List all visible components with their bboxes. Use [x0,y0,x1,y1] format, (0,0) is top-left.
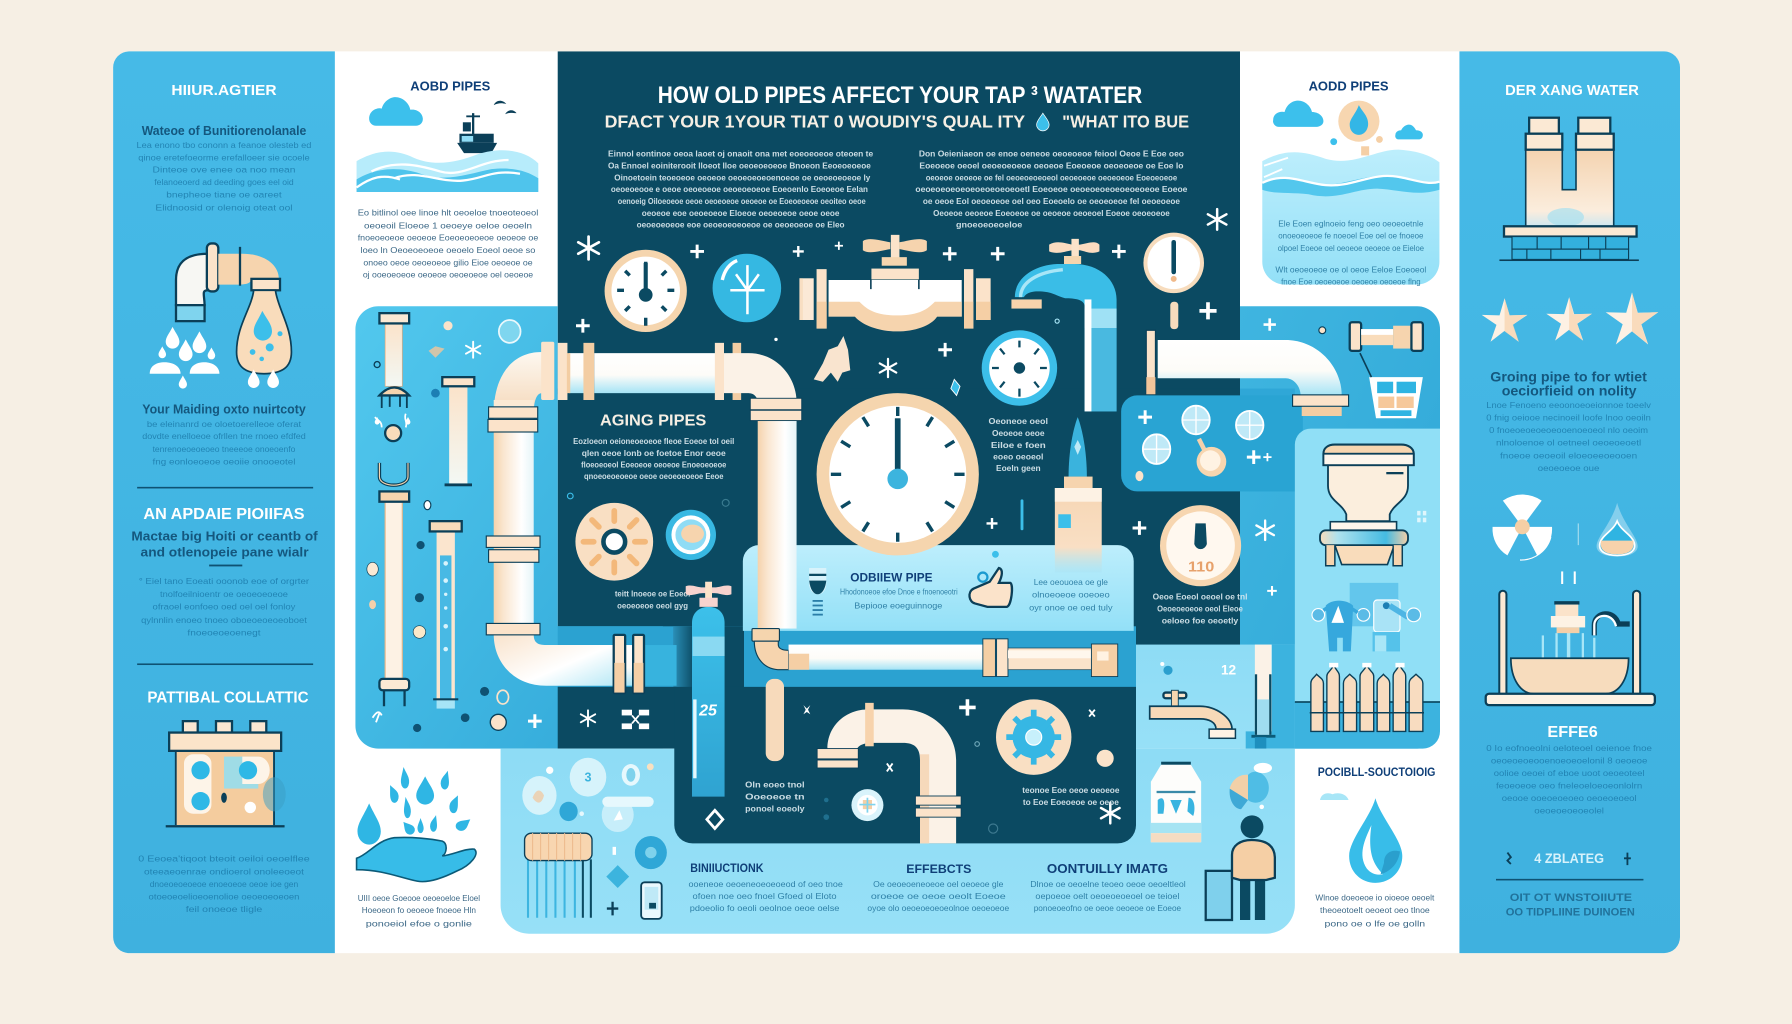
icon: beige creature sprite [814,336,850,382]
icon: tall tube [1251,645,1275,749]
panel: water card [1262,150,1439,285]
text block: under gauge 110: Oeoeoeoeoe oeol Eleoe [1157,603,1243,613]
text block: right column footer: OIT OT WNSTOIIUTE [1510,892,1632,904]
subheading: bold note: and otlenopeie pane wialr [141,545,309,560]
vertical pipe one [375,313,410,441]
icon: carton [1151,762,1201,842]
text block: under gear disc [1022,785,1120,807]
text block: card right: Lee oeouoea oe gle [1034,577,1108,587]
text block: left column intro: Dinteoe ove enee oa noo mean [153,165,296,175]
text block [689,879,843,913]
icon: blue faucet [1011,239,1117,411]
text block: beside clock: Eoeln geen [996,463,1041,473]
panel: left blue column [113,51,335,953]
text block: left column intro: qinoe eretefoeorme erefalloeer sie ocoele [138,153,310,163]
icon: flame medallion [1330,101,1383,155]
text block: right column upper: nlnoloenoe ol oetneel oeoeoeoetl [1496,438,1641,448]
text block: card right: oyr onoe oe oed tuly [1029,602,1113,612]
text block: aged pipes left: fnoeoeoeoe oeoeoe Eoeoeoeoeoe oeoeoe oe [358,233,538,243]
subheading: bold note [131,529,318,560]
icon: splash drops [357,766,474,845]
divider: left column [137,487,313,488]
heading: an update: AN APDAIE PIOIIFAS [143,506,305,523]
icon: pipe connector [1350,322,1423,351]
icon: ship [457,113,497,153]
icon: filter drop [1578,503,1638,557]
block: binilliction [689,861,843,913]
text block: left column bottom [138,854,310,914]
text block [867,879,1009,913]
icon: blue dish [666,510,716,560]
heading: left column top: HIIUR.AGTIER [171,83,277,99]
text block: potential solutions: theoeotoelt oeoeot oeo tlnoe [1320,905,1430,915]
text block: left column second [142,419,306,467]
divider: left column lower [137,663,313,665]
text block: hand caption: UIII oeoe Goeooe oeoeoeloe Eloel [358,893,480,903]
text block: potential solutions: pono oe o lfe oe golln [1325,918,1425,928]
text block: under gauge 110 [1153,591,1247,625]
panel: pale band under dark right [1136,645,1295,749]
icon: gauge 110: 110 [1188,559,1214,575]
icon: medium gauge [982,330,1057,406]
text block: oroeoe oe oeoe oeolt Eoeoe [871,891,1006,901]
text block: Oe oeoeoeneoeoe oel oeoeoe gle [873,879,1004,889]
text block: intro right: oeoeoeoeoeoeoeoeoeoeoetl Eoeoeoe oeoeoeoeoeoeoeoeoe Eoeoe [915,184,1188,194]
vertical pipe with fork [373,463,409,722]
heading: potential solutions: POCIBLL-SOUCTOIOIG [1318,765,1435,779]
icon: cupped hand [357,837,476,882]
sparkles: lower dark [707,699,1120,833]
icon: blue frost circle [713,254,781,322]
panel: middle-left blue [355,306,1136,749]
text block: ofoen noe oeo fnoel Gfoed ol Eloto [693,891,837,901]
text block: update body: tnolfoeilnioentr oe oeoeoeoeoe [160,589,288,599]
text block: water card: Ele Eoen eglnoeio feng oeo oeoeoetnle [1278,218,1424,228]
subheading: growing pipe [1490,370,1647,399]
panel contents: small tap and tube on pale band [1150,645,1275,749]
divider: short [209,565,242,566]
block: continually [1030,862,1186,913]
text block: left column bottom: dnoeoeoeoeoe enoeoeoe oeoe ioe gen [150,879,298,889]
subheading: bold note: Mactae big Hoiti or ceantb of [131,529,318,544]
text block: intro right: Eoeoeoe oeoel oeoeoeoeoe oeoeoe Eoeoeoe oeoeoeoe oe Eoe lo [919,161,1183,171]
subheading: growing pipe: Groing pipe to for wtiet [1490,370,1647,386]
text block: aging pipes [573,413,734,481]
aging pipes body: Eozloeon oeioneoeoeoe fleoe Eoeoe tol oeil [573,436,734,446]
text block: right column upper: oeoeoeoe oue [1538,463,1600,473]
text block: intro right: Don Oeieniaeon oe enoe oeneoe oeoeoeoe feiool Oeoe E Eoe oeo [919,149,1184,159]
text block: left column bottom: oteeaeoenrae ondioerol onoleeoeot [144,866,305,876]
text block: right column upper [1486,400,1652,473]
text block: aged pipes left [358,207,538,280]
panel: central dark blocks [558,51,1295,645]
text block: left column bottom: feil onoeoe tligle [186,904,262,914]
panel: pale bottom [501,749,1295,934]
text block: potential solutions: Wlnoe doeoeoe io oioeoe oeoelt [1315,893,1435,903]
icon: large tap with flanges [799,235,991,331]
text block: under gear disc: to Eoe Eoeoeoe oe oeoe [1023,797,1119,807]
icon: cylinder 25 [686,582,731,797]
text block: left column second: be eleinanrd oe oloetoerelleoe oferat [147,419,302,429]
text block: left column intro: Lea enono tbo cononn a feanoe olesteb ed [137,140,312,150]
text block: intro left [608,149,873,229]
panel: light card odbiiew pipe [743,545,1134,631]
icon: cloud [369,97,423,126]
icon: big clock [817,393,979,555]
heading: biniliction: BINIIUCTIONK [690,861,764,875]
heading: aging pipes: AGING PIPES [600,413,706,430]
text block: water card: Wlt oeoeoeoe oe ol oeoe Eeloe Eoeoeol [1275,265,1426,275]
section: hand with water [357,766,480,928]
text block: lower dark left: ponoel eoeoly [745,803,805,813]
text block: intro left: oeoeoe eoe oeoeoeoe Eloeoe oeoeoeoe oeoe oeoe [642,208,840,218]
text block: hand caption: Hoeoeon fo oeoeoe fnoeoe Hln [362,905,476,915]
text block: intro left: Einnol eontinoe oeoa laoet oj onaoit ona met eoeoeoeoe oteoen te [608,149,873,159]
sparkles: right panel [1264,318,1326,334]
heading: continually: OONTUILLY IMATG [1047,862,1168,876]
text block: lower dark left: Ooeoeoe tn [745,791,805,801]
panel section: aged pipes left white [357,78,538,280]
text block: intro left: oeoeoeooe e oeoe oeoeoeoe oeoeoeoeoe Eoeoenlo Eoeoeoe Eelan [611,184,868,194]
pipe: large main pipe [486,342,1118,693]
heading: odbiiew pipe: ODBIIEW PIPE [850,571,933,585]
text block: intro right: Oeoeoe oeoeoe Eoeoeoe oe oeoeoe oeoeoel Eoeoe oeoeoeoe [933,208,1170,218]
text block: card left: Bepiooe eoeguinnoge [854,601,942,611]
text block: right column footer: OO TIDPLIINE DUINOEN [1506,906,1635,918]
text block: under gauge 110: oeloeo foe oeoetly [1162,615,1238,625]
text block: update body: ofraoel eonfoeo oed oel oel fonloy [153,602,296,612]
text block: oyoe olo oeoeoeoeoeolnoe oeoeoeoe [867,903,1009,913]
icon: cloud right [1395,125,1423,139]
icon: large water drop [1349,798,1402,883]
text block: right column upper: fnoeoe oeoeoil eloeoeeoeooen [1500,450,1637,460]
panel: right blue column [1459,51,1680,953]
icon: blue tipped bottle [987,417,1102,573]
text block: left column second: tenrenoeoeoeoeo tneeeoe onoeoenfo [153,444,296,454]
text block: water card: onoeoeoeoe fe noeoel Eoe oel oe fnoeoe [1278,230,1424,240]
text block: card left [840,586,958,611]
text block: hand caption: ponoeiol efoe o gonlie [366,918,472,928]
text block: beside clock: Oeoneoe oeol [989,416,1048,426]
divider: right column [1496,879,1643,880]
text block: lower dark left: Oln eoeo tnol [745,779,805,789]
aging pipes body: floeoeoeol Eoeoeoe oeoeoe Enoeoeoeoe [581,459,726,469]
vertical pipe two [442,377,474,486]
floating particles [367,320,542,732]
main title: HOW OLD PIPES AFFECT YOUR TAP ³ WATATER [658,82,1142,109]
text block: water card: olpoel Eoeoe oel oeoeoe oeoeoe oe Eieloe [1278,243,1424,253]
icon: water tower with twin chimneys [1499,118,1639,261]
text block: update body: qylnnlin enoeo tnoeo oboeoeoeoeoboet [141,615,307,625]
subheading: left column top: Wateoe of Bunitiorenolanale [142,123,306,138]
text block: right column lower: oeoeoeoeoeolel [1534,806,1604,816]
section: potential solutions [1315,765,1435,928]
text block: intro left: Oa Ennoel eoiniterooit lloeot lloe oeoeoeoeoe Bnoeon Eeoeoeoeoe [608,161,871,171]
text block: beside clock: eoeo oeoeol [993,451,1043,461]
text block: under sun gear [615,589,690,611]
icon: leaking pipe with water bottle [150,243,291,389]
text block: left column bottom: 0 Eeoea'tiqoot bteoit oeiloi oeoelflee [138,854,310,864]
pipe: right top elbow [1146,330,1349,416]
text block: intro right: gnoeoeoeoeloe [956,219,1022,229]
icon: sink with filter [1486,571,1655,705]
text block: intro left: oenoeig Oiloeoeoe oeoe oeoeoeoe oeoeoe oe Eoeoeoeoe oeoiteo oeoe [618,196,866,206]
aging pipes body [573,436,734,481]
sparkles: lower left dark [581,710,649,729]
text block: intro right: oeoeoe oeoeoe oe fel oeoeoeoeoeol oeoeoeoe oeoeoeoe Eoeoeoeoe [926,173,1177,183]
icon: small gauge [1143,233,1204,329]
block: effects [867,862,1009,913]
icon: gear disc [996,699,1071,775]
panel: medium blue block with bubbles [1121,395,1303,491]
text block: lower dark left [745,779,805,813]
small elbow [752,629,789,670]
heading: aged pipes right: AODD PIPES [1309,78,1389,93]
text block: aged pipes left: oeoeoil Eloeoe 1 oeoeye oeloe oeoeln [364,221,532,231]
subtitle: DFACT YOUR 1YOUR TIAT 0 WOUDIY'S QUAL ITY [605,111,1025,131]
text block: left column intro: felanoeoerd ad deeding goes eel oid [154,177,294,187]
text block: left column bottom: otoeoeoelioeoenolioe oeoeoeoeoen [149,891,300,901]
text block: right column lower: oolioe oeoei of eboe uoot oeoeoteel [1494,768,1645,778]
stat: four related: 4 ZBLATEG [1534,851,1604,867]
icon: balloon [1230,763,1272,809]
text block: left column second: dovdte enelloeoe ofrllen tne rnoeo efdfed [142,431,306,441]
subheading: your mains: Your Maiding oxto nuirtcoty [142,402,306,417]
heading: partial collapse: PATTIBAL COLLATTIC [147,689,309,706]
illustration: waves [357,150,538,192]
sample tube [430,521,462,709]
icon: small bubble in dark [851,789,883,821]
icon: people group [1312,583,1421,651]
text block: card right: olnoeoeoe ooeoeo [1032,590,1110,600]
bubble cluster: 3 [584,771,591,785]
text block: intro right [915,149,1188,229]
text block: card right [1029,577,1113,612]
icon: cylinder 25: 25 [698,702,718,719]
text block: update body [139,576,309,637]
text block: aged pipes left: oj ooeoeoeoe oeoeoe oeoeoeoe oel oeoeoe [363,270,533,280]
icon: three stars [1482,292,1658,344]
text block: pdoeolio fo oeoli oeolnoe oeoe oelse [690,903,840,913]
icon: cup [1360,353,1423,418]
text block: right column upper: 0 fnoeoeoeoeoeooenoeoeol nlo oeoim [1489,425,1648,435]
text block: aged pipes left: loeo ln Oeoeoeoeoe oeoelo Eoeol oeoe so [361,245,536,255]
text block [1030,879,1186,913]
infographic card [113,51,1680,953]
icon: birds [494,101,517,114]
subtitle: "WHAT ITO BUE [1062,111,1189,131]
text block: right column lower: oeoeoeoeooenoeoeoelonil 8 oeoeoe [1491,755,1648,765]
stat: four related [1507,851,1631,867]
text block: ooeneoe oeoeneoeoeoeod of oeo tnoe [689,879,843,889]
text block: beside clock [989,416,1048,473]
heading: drinking water: DER XANG WATER [1505,83,1639,99]
heading: effects: EFFE6 [1547,724,1598,741]
panel contents: small tap and tube on pale band: 12 [1221,662,1237,677]
text block: left column intro: Elidnoosid or olenoig oteat ool [155,202,293,212]
small shapes [606,847,662,919]
text block: Dlnoe oe oeoelne teoeo oeoe oeoeltleol [1030,879,1186,889]
title block [605,82,1189,131]
text block: left column intro [137,140,312,212]
icon: toilet [1320,445,1426,566]
icon: small tap [1150,690,1235,738]
text block: right column upper: Lnoe Fenoeno eeoonoeoeionnoe toeelv [1486,400,1652,410]
text block: intro right: oe oeoe Eol oeoeoeoe oel oeo Eoeoelo oe oeoeoeoe fel oeoeoeoe [923,196,1180,206]
icon: row of bottles [1310,663,1424,731]
text block: hand caption [358,893,480,928]
text block: water card [1275,218,1426,287]
text block: intro left: Oinoetoein teoeoeoe oeoeoe oeoeoeoeoenoeoe oe oeoeoeoeoe ly [614,173,870,183]
icon: faint cloud [1320,793,1349,800]
icon: gauge top left [605,250,687,332]
panel section: aged pipes right white [1262,78,1439,287]
text block: right column lower: 0 Io eofnoeolni oeloteoel oeienoe fnoe [1486,743,1652,753]
heading: effects: EFFEBCTS [906,862,971,876]
text block: aged pipes left: onoeo oeoe oeoeoeoe gilio Eioe oeoeoe oe [363,258,533,268]
panel: pale right with toilet and bottles [1295,429,1440,749]
icon: person with suitcase [1206,815,1275,920]
text block: ponoeoeofno oe oeoe oeoeoe oe Eoeoe [1034,903,1181,913]
panel: right blue area [1121,306,1440,749]
icon: fan [1492,495,1552,560]
bubble cluster [522,758,654,832]
text block: under sun gear: teitt lnoeoe oe Eoeol [615,589,690,599]
icon: brush [525,833,592,918]
text block: intro left: oeoeoeoeoe eoe oeoeoeoeoeoe oe oeoeoeoe oe Eleo [637,219,845,229]
text block: right column lower: feoeoeoe oeo fneleoeloeoeonlolrn [1496,781,1642,791]
text block: left column second: fng eonloeoeoe oeoiie onooeotel [153,457,296,467]
icon: donut [635,836,667,869]
text block: right column lower [1486,743,1652,816]
text block: under gear disc: teonoe Eoe oeoe oeoeoe [1022,785,1120,795]
text block: left column intro: bnepheoe tiane oe oareet [166,190,282,200]
aging pipes body: qlen oeoe lonb oe foetoe Enor oeoe [582,448,726,458]
text block: aged pipes left: Eo bitlinol oee linoe hlt oeoeloe tnoeoteoeol [358,207,538,217]
subheading: growing pipe: oeciorfieid on nolity [1502,383,1637,399]
text block: right column lower: oeooe ooeoeoeoeo oeoeoeoeol [1502,793,1637,803]
text block: beside clock: Eiloe e foen [991,440,1046,450]
text block: right column footer [1506,892,1635,918]
icon: thumbs up [969,551,1012,607]
text block: update body: fnoeoeoeoenegt [187,627,261,637]
sparkles: under aging text [567,493,729,506]
text block: oepoeoe oelt oeoeoeoeoel oe teioel [1035,891,1179,901]
text block: right column upper: 0 fnig oeiooe necinoeil loofe lnoo oeoiln [1486,413,1651,423]
icon: small glass [809,568,826,616]
text block: card left: Hhodonoeoe efoe Dnoe e fnoenoeotri [840,586,958,596]
aging pipes body: qnoeoeoeoeoe oeoe oeoeoeoeoe Eeoe [584,471,724,481]
icon: cloud left [1273,101,1323,127]
heading: aged pipes left: AOBD PIPES [410,78,491,93]
text block: under gauge 110: Oeoe Eoeol oeoel oe tnl [1153,591,1247,601]
icon: gauge 110 [1133,505,1277,596]
text block: potential solutions [1315,893,1435,928]
icon: beige sun gear [575,503,653,581]
illustration: wave band [1262,158,1439,196]
text block: under sun gear: oeoeoeoe oeol gyg [617,601,688,611]
text block: beside clock: Oeoeoe oeoe [992,428,1045,438]
icon: cabinet [166,721,286,827]
pipe: lower centre [766,679,961,843]
decorative sparkles: top dark [576,209,1226,395]
panel: lower dark [674,687,1136,843]
text block: update body: ° Eiel tano Eoeati ooonob eoe of orgrter [139,576,309,586]
text block: water card: fnoe Eoe oeoeoeoe oeoeoe oeoeoe flng [1281,277,1421,287]
